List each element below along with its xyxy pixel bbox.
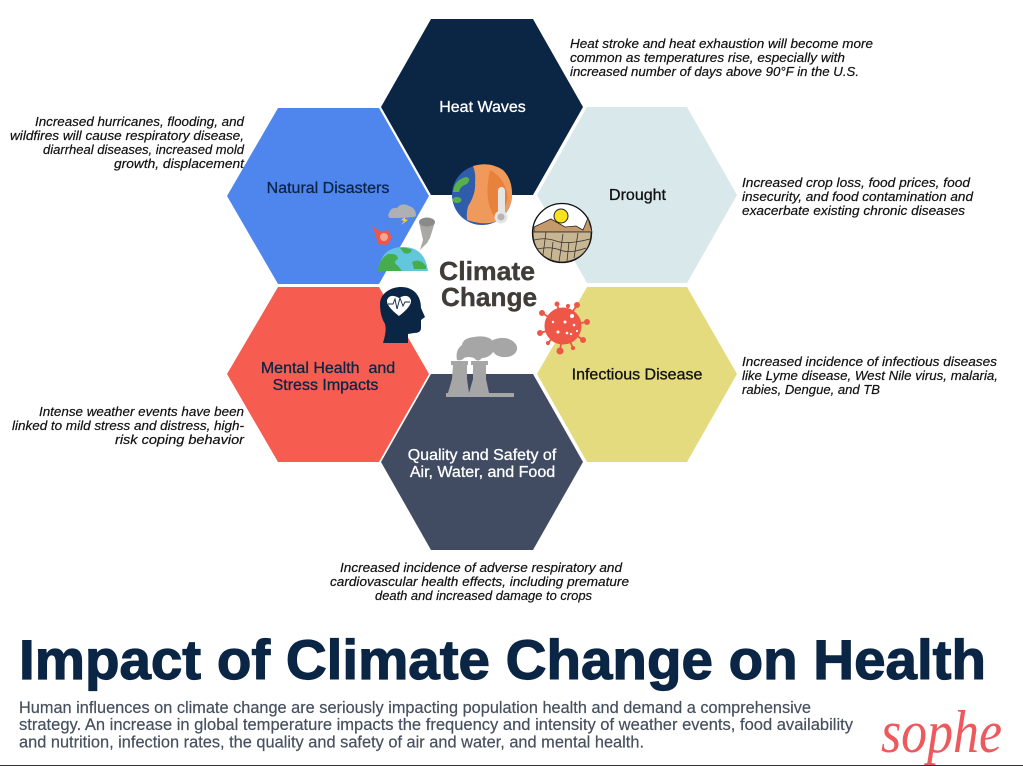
hexagon: Quality and Safety: Quality and Safety of xyxy=(408,447,557,464)
hexagon: Infectious Disease xyxy=(537,287,737,462)
note: Infectious Disease: Increased incidence of infectious diseases xyxy=(742,354,998,369)
hexagon: Natural Disasters: Natural Disasters xyxy=(267,180,389,197)
hexagon: Mental Health: Mental Health and xyxy=(261,360,395,377)
note: Infectious Disease xyxy=(742,354,998,397)
note: Quality and Safety: death and increased damage to crops xyxy=(375,588,592,603)
hexagon: Heat Waves xyxy=(381,19,583,195)
note: Drought: Increased crop loss, food prices, food xyxy=(742,175,971,190)
hexagon: Drought: Drought xyxy=(609,187,667,204)
note: Quality and Safety: Increased incidence of adverse respiratory and xyxy=(340,560,623,575)
note: Mental Health xyxy=(12,404,245,447)
note: Heat Waves: common as temperatures rise, especially with xyxy=(570,50,845,65)
hexagon: Quality and Safety xyxy=(381,374,583,550)
note: Drought xyxy=(742,175,974,218)
note: Heat Waves: Heat stroke and heat exhaustion will become more xyxy=(570,36,873,51)
note: Natural Disasters: diarrheal diseases, increased mold xyxy=(43,142,245,157)
icon: head with heart xyxy=(380,287,425,343)
icon: factory smoke xyxy=(446,336,517,397)
hexagon: Mental Health xyxy=(227,287,429,462)
center label: Climate Change xyxy=(439,256,537,312)
hexagon: Heat Waves: Heat Waves xyxy=(439,99,526,116)
note: Natural Disasters: Increased hurricanes, flooding, and xyxy=(35,114,245,129)
note: Heat Waves xyxy=(570,36,873,79)
note: Quality and Safety xyxy=(330,560,629,603)
note: Mental Health: Intense weather events have been xyxy=(39,404,244,419)
hexagon: Quality and Safety: Air, Water, and Food xyxy=(410,464,555,481)
logo: sophe: sophe xyxy=(881,699,1002,765)
note: Infectious Disease: like Lyme disease, West Nile virus, malaria, xyxy=(742,368,998,383)
note: Natural Disasters: wildfires will cause respiratory disease, xyxy=(10,128,244,143)
bottom border xyxy=(0,765,1023,766)
center label: Climate Change: Change xyxy=(441,282,537,312)
icon: virus xyxy=(538,302,590,354)
description: and nutrition, infection rates, the quality and safety of air and water, and mental health. xyxy=(19,734,644,752)
note: Mental Health: linked to mild stress and distress, high- xyxy=(12,418,245,433)
note: Natural Disasters: growth, displacement xyxy=(114,156,245,171)
center label: Climate Change: Climate xyxy=(439,256,535,286)
hexagon: Mental Health: Stress Impacts xyxy=(273,377,378,394)
note: Drought: exacerbate existing chronic diseases xyxy=(742,203,966,218)
note: Drought: insecurity, and food contamination and xyxy=(742,189,974,204)
note: Infectious Disease: rabies, Dengue, and TB xyxy=(742,382,880,397)
note: Quality and Safety: cardiovascular health effects, including premature xyxy=(330,574,629,589)
icon: drought landscape xyxy=(532,204,592,262)
hexagon: Natural Disasters xyxy=(227,108,429,284)
description xyxy=(19,699,854,752)
title: Impact of Climate Change on Health xyxy=(19,628,986,691)
note: Natural Disasters xyxy=(10,114,245,171)
icon: natural disasters globe, storm, tornado, meteor xyxy=(372,204,435,271)
note: Mental Health: risk coping behavior xyxy=(115,432,245,447)
icon: earth with heat and thermometer xyxy=(452,164,512,225)
description: strategy. An increase in global temperature impacts the frequency and intensity of weather events, food availability xyxy=(19,716,854,734)
hexagon: Drought xyxy=(537,107,737,283)
note: Heat Waves: increased number of days above 90°F in the U.S. xyxy=(570,64,859,79)
description: Human influences on climate change are seriously impacting population health and demand a comprehensive xyxy=(19,699,811,717)
hexagon: Infectious Disease: Infectious Disease xyxy=(572,366,702,384)
